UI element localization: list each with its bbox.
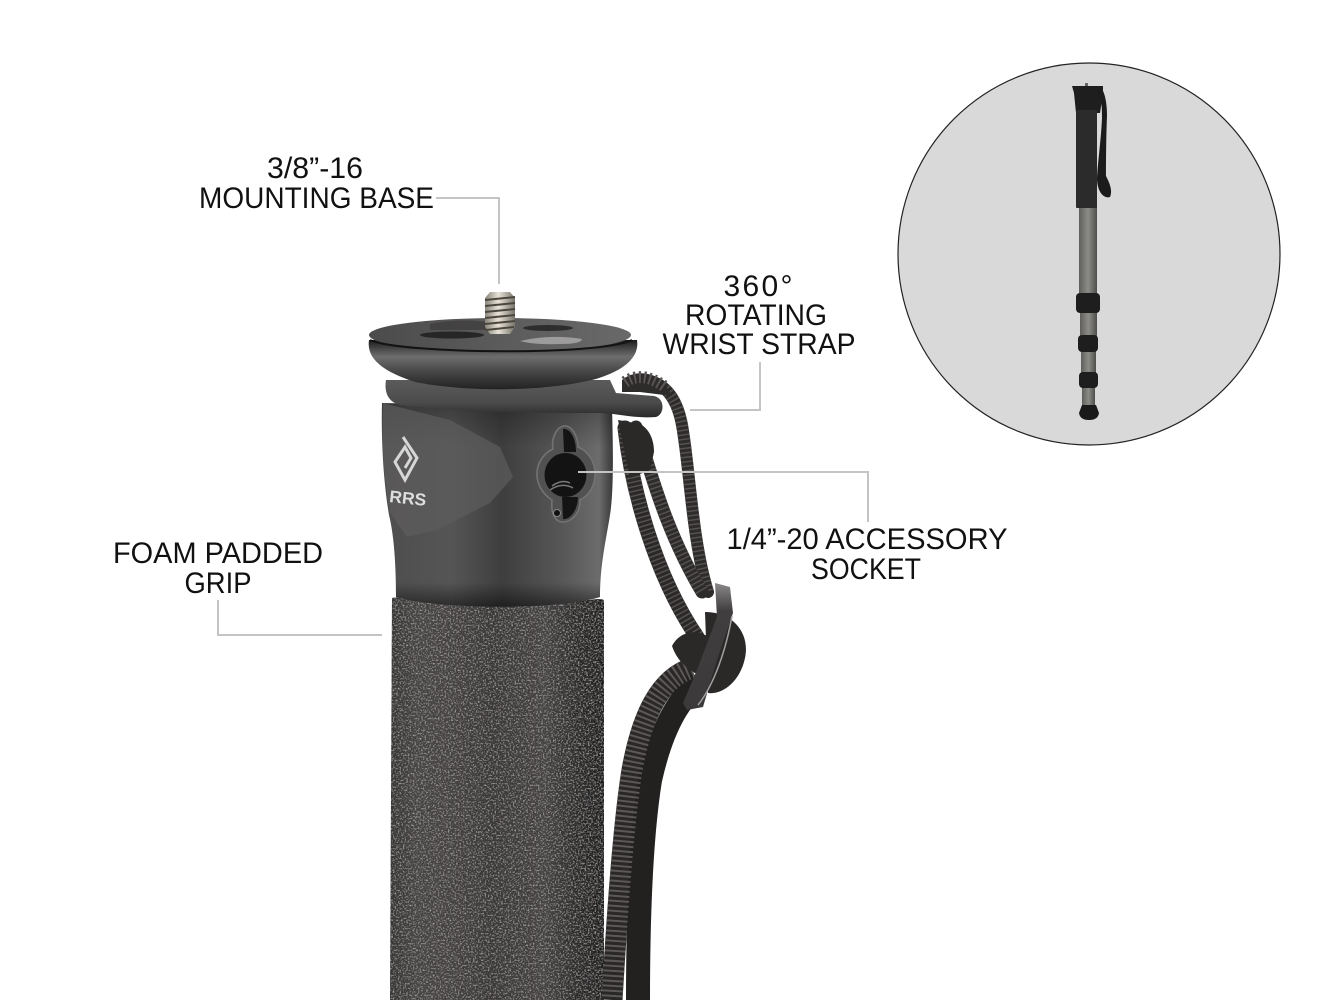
callout: foam grip [113,537,382,635]
callout: mounting base: MOUNTING BASE [199,182,434,215]
head body [382,403,613,607]
callout: accessory socket [578,472,1008,586]
callout: mounting base [199,152,499,284]
callout: foam grip: FOAM PADDED [113,537,323,570]
strap ring [386,380,663,417]
callout: wrist strap: WRIST STRAP [662,328,856,361]
strap knot [672,583,746,710]
mounting dish [369,340,637,389]
callout: accessory socket: 1/4”-20 ACCESSORY [726,523,1008,556]
callout: foam grip: GRIP [184,567,252,600]
callout: wrist strap: 360° [724,270,792,303]
callout: wrist strap: ROTATING [685,299,827,332]
wide webbing strap lower [612,668,692,1000]
RRS logo [388,437,427,510]
callout: accessory socket: SOCKET [811,553,921,586]
monopod product photo [369,292,746,1000]
logo facet [382,403,513,537]
RRS logo: RRS [388,487,427,510]
inset circle: full monopod view [898,63,1280,445]
accessory socket [537,426,595,522]
mini monopod [1072,83,1111,420]
foam padded grip tube [390,597,604,1000]
callout: mounting base: 3/8”-16 [267,152,363,185]
mounting screw [485,292,515,334]
top plate [369,318,631,352]
wrist strap cords and webbing [612,373,708,1000]
callout: wrist strap [662,270,856,410]
